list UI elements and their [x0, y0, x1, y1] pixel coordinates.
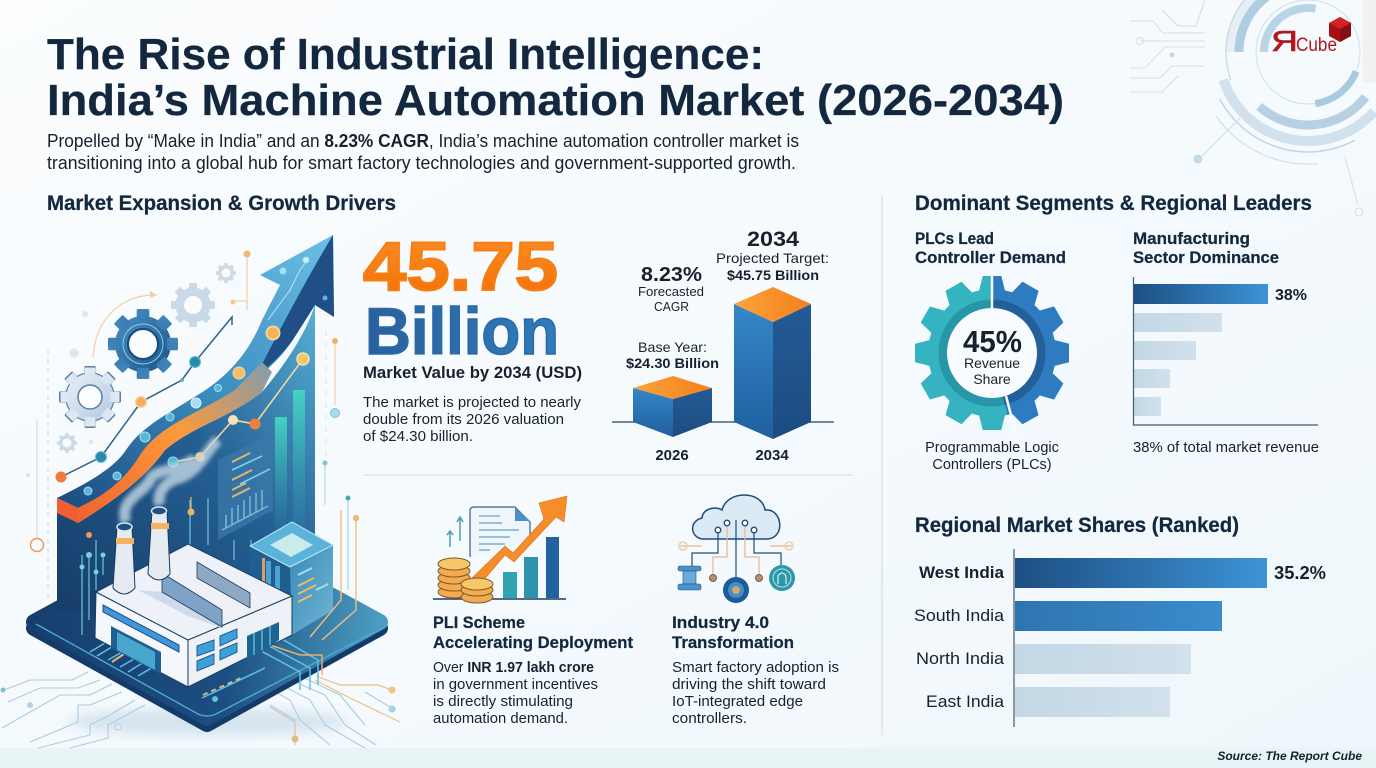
title: [47, 30, 1064, 125]
circuit traces below platform: [0, 672, 400, 748]
Industry 4.0 text block: controllers.: [672, 711, 747, 727]
PLC caption: [925, 440, 1059, 473]
regional bar chart: 35.2%: [1274, 563, 1326, 583]
PLC caption: Controllers (PLCs): [932, 457, 1052, 473]
big number: 45.75 Billion: [363, 228, 559, 368]
PLI text block: Accelerating Deployment: [433, 633, 633, 652]
subtitle: [47, 131, 799, 173]
title: India’s Machine Automation Market (2026-2034): [47, 76, 1064, 125]
2026 labels: $24.30 Billion: [626, 355, 719, 371]
2034 labels: $45.75 Billion: [727, 267, 819, 283]
decorative circuit rings, top right: [1130, 0, 1376, 216]
bar: 2034: [734, 287, 811, 439]
PLC heading: PLCs Lead: [915, 229, 994, 248]
axis years: 2034: [755, 447, 789, 464]
arrow ribbon: [57, 235, 334, 523]
footer strip: [0, 748, 1376, 768]
regional bar chart: West India: [919, 563, 1005, 582]
server cube: [250, 522, 333, 635]
CAGR labels: Forecasted: [638, 284, 704, 299]
factory building: [95, 544, 292, 687]
market value description: of $24.30 billion.: [363, 429, 473, 445]
ribbon nodes: [84, 257, 328, 495]
PLI text block: automation demand.: [433, 711, 568, 727]
subtitle: Propelled by “Make in India” and an 8.23% CAGR, India’s machine automation controller market is: [47, 131, 799, 151]
2026 labels: Base Year:: [638, 339, 707, 355]
platform: [34, 528, 388, 736]
heading: market expansion: Market Expansion & Growth Drivers: [47, 192, 396, 215]
PLC heading: Controller Demand: [915, 248, 1066, 267]
chart line with nodes: [56, 317, 232, 482]
big number: 45.75 Billion: 45.75: [363, 228, 558, 305]
source note: Source: The Report Cube: [1217, 749, 1362, 763]
tower detail lines: [80, 497, 251, 635]
icon: cloud with IoT connections: [678, 495, 795, 603]
PLI text block: Over INR 1.97 lakh crore: [433, 660, 594, 676]
CAGR labels: CAGR: [654, 299, 689, 314]
regional bar chart: East India: [926, 692, 1005, 711]
market value description: [363, 395, 582, 445]
PLC heading: [915, 229, 1066, 267]
2026 labels: [626, 339, 719, 371]
Industry 4.0 text block: IoT-integrated edge: [672, 694, 803, 710]
big number: 45.75 Billion: Billion: [365, 294, 559, 368]
tower backdrop: [57, 305, 315, 610]
logo: RCube: Cube: [1296, 35, 1337, 56]
PLC caption: Programmable Logic: [925, 440, 1059, 456]
Industry 4.0 text block: Smart factory adoption is: [672, 660, 839, 676]
gear donut chart: 45%: [915, 274, 1069, 434]
smoke: [125, 440, 218, 522]
market value description: double from its 2026 valuation: [363, 412, 564, 428]
regional bar chart: [914, 549, 1326, 727]
Industry 4.0 text block: driving the shift toward: [672, 677, 826, 693]
3D bar chart: 2026 vs 2034: [612, 228, 834, 464]
PLI text block: in government incentives: [433, 677, 598, 693]
teal bars and inner line: [168, 353, 309, 535]
PLI text block: [433, 613, 633, 727]
surrounding accents: [26, 250, 359, 640]
CAGR labels: [638, 264, 704, 314]
manufacturing caption: 38% of total market revenue: [1133, 440, 1319, 456]
axis years: 2026: [655, 447, 689, 464]
bar: 2026: [633, 376, 712, 437]
regional bar chart: North India: [916, 649, 1005, 668]
2034 labels: [716, 228, 829, 283]
gear donut chart: 45%: Revenue: [964, 355, 1020, 371]
PLI text block: PLI Scheme: [433, 613, 525, 632]
gear donut chart: 45%: 45%: [963, 324, 1022, 359]
heading: regional market shares: Regional Market Shares (Ranked): [915, 514, 1239, 537]
Industry 4.0 text block: [672, 613, 839, 727]
dashboard screen: [218, 433, 273, 540]
manufacturing bar chart: 38%: [1275, 287, 1307, 304]
regional bar chart: South India: [914, 606, 1005, 625]
Industry 4.0 text block: Industry 4.0: [672, 613, 769, 632]
2034 labels: Projected Target:: [716, 250, 829, 266]
logo: RCube: Я: [1271, 26, 1298, 58]
manufacturing bar chart: [1134, 277, 1318, 425]
title: The Rise of Industrial Intelligence:: [47, 30, 764, 79]
subtitle: transitioning into a global hub for smart factory technologies and government-supported growth.: [47, 153, 796, 173]
gears: [57, 263, 236, 453]
panel: manufacturing sector dominance: [1133, 229, 1319, 456]
market value description: The market is projected to nearly: [363, 395, 582, 411]
manufacturing heading: Manufacturing: [1133, 229, 1250, 248]
heading: dominant segments: Dominant Segments & Regional Leaders: [915, 192, 1312, 215]
gear donut chart: 45%: Share: [973, 371, 1011, 387]
Industry 4.0 text block: Transformation: [672, 633, 794, 652]
market value caption: Market Value by 2034 (USD): [363, 363, 582, 382]
grey logo corner patch: [1363, 0, 1376, 82]
chimneys: [113, 507, 170, 594]
CAGR labels: 8.23%: [641, 264, 702, 286]
logo: RCube: [1271, 17, 1351, 58]
manufacturing heading: Sector Dominance: [1133, 248, 1279, 267]
icon: PLI coins, document and arrow: [433, 496, 567, 603]
axis years: [655, 447, 789, 464]
PLI text block: is directly stimulating: [433, 694, 573, 710]
2034 labels: 2034: [747, 228, 799, 251]
panel: PLC controller demand: [915, 229, 1069, 473]
manufacturing heading: [1133, 229, 1279, 267]
illustration: industrial growth arrow and factory: [0, 235, 400, 748]
